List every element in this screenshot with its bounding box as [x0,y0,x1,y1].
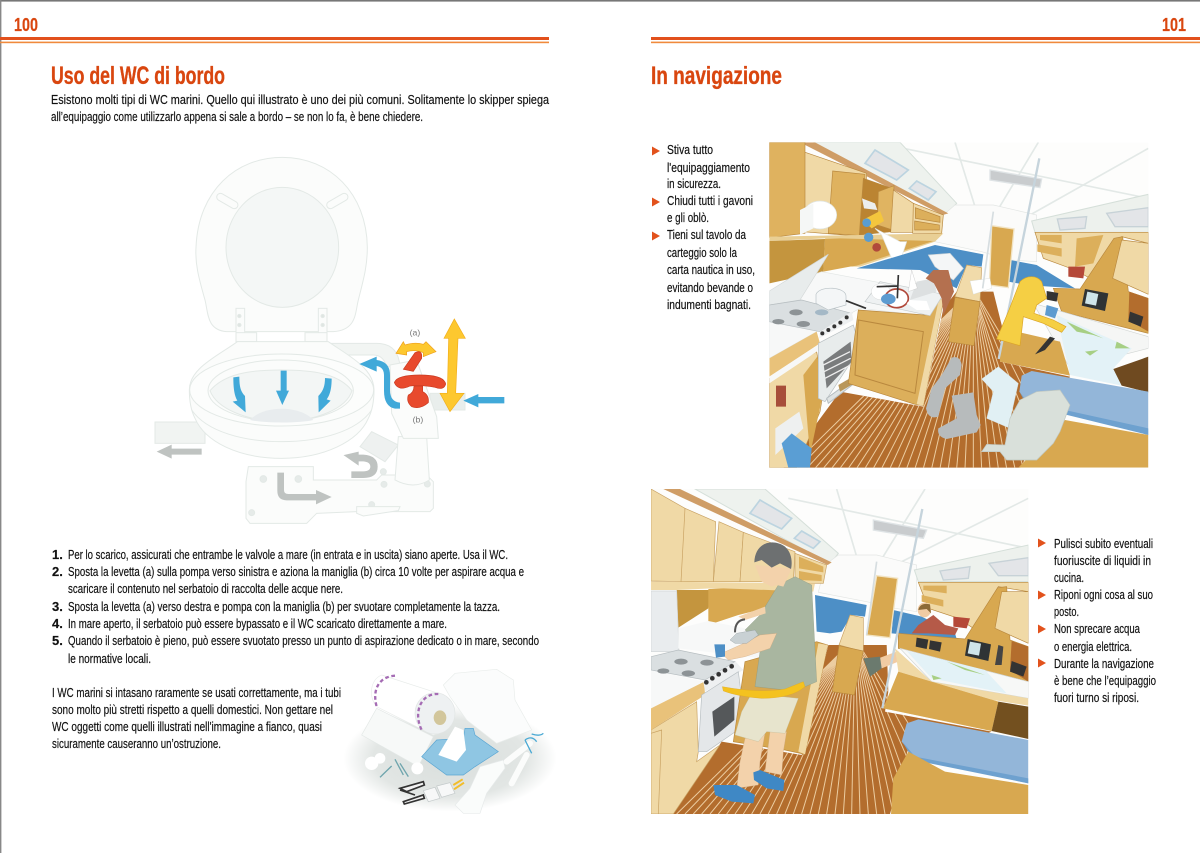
illustration: tidy cabin with crew [651,489,1028,814]
sink with dishes [865,270,943,316]
label (b): (b) [413,414,423,424]
floor [783,292,1070,468]
seat lid [196,157,367,332]
mug [714,644,725,658]
counter left [651,670,704,708]
table base [883,648,1028,731]
sock/boots [926,357,981,439]
cabinet lower band and rear wall [769,233,943,267]
connecting hose with clamp [360,432,398,462]
bullet: rest: fuori turno si riposi. [1054,690,1139,705]
step 5: le normative locali. [68,651,151,666]
bullet: stowage: in sicurezza. [667,176,721,191]
inlet hose [327,343,400,367]
bullet: chart table: Tieni sul tavolo da [667,227,747,242]
lower left cabinet [769,352,823,468]
wood trim [800,142,948,215]
label (a): (a) [410,328,420,338]
warning paragraph: I WC marini si intasano raramente se usati correttamente, ma i tubi [52,685,341,700]
gray arrow bottom [277,473,332,504]
left ceiling panel [813,142,957,215]
yellow pills [453,779,464,789]
bullet: stowage [652,142,750,191]
crew member in berth [863,603,958,677]
illustration: items not to flush [343,669,557,813]
bullet: lockers: Chiudi tutti i gavoni [667,193,753,208]
step 2 [52,564,524,596]
yellow lever arrow (a) [396,342,436,357]
step 2: scaricare il contenuto nel serbatoio di raccolta delle acque nere. [68,581,343,596]
red pump handle and lever [394,352,446,408]
bullet: chart table: evitando bevande o [667,280,753,295]
bullet: rest [1038,656,1156,705]
central locker [955,265,982,302]
central locker [839,615,863,652]
blue seat [1019,371,1148,435]
warning paragraph: sicuramente causeranno un’ostruzione. [52,736,221,751]
upper cabinets [651,489,827,583]
yellow double arrow (pump stroke) [440,319,465,412]
bullet: chart table: carta nautica in uso, [667,262,755,277]
cotton pads and buds [365,753,423,777]
pot [816,288,846,310]
dishes and falling items from cupboard [800,198,907,258]
counter [678,621,762,658]
intro text: Esistono molti tipi di WC marini. Quello qui illustrato è uno dei più comuni. Solitamente lo skipper spiega [51,92,550,107]
ceiling hatch center [873,520,927,538]
door [989,226,1014,288]
legs [737,732,787,788]
right upper cabinets [918,582,1028,628]
floor stripes [798,300,1025,468]
map on floor [982,367,1018,428]
lower cabinet [651,702,720,814]
step 5 [52,633,539,666]
bullet: save water: o energia elettrica. [1054,639,1132,654]
step 5: Quando il serbatoio è pieno, può essere svuotato presso un punto di aspirazione dedicato o in mare, secondo [68,633,539,648]
bullet: spills: cucina. [1054,570,1084,585]
door [867,576,898,638]
chart table and chart [1033,303,1148,368]
counter left [769,271,907,358]
blue berth [857,245,983,288]
shorts [735,693,798,742]
bullet: rest: è bene che l’equipaggio [1054,673,1156,688]
pump base plate [246,467,433,523]
page number 100: 100 [14,15,38,35]
illustration: marine toilet with arrows [155,157,504,523]
pump body [390,360,438,438]
head [755,565,792,587]
intake pipe right [430,393,465,410]
numbered instructions [52,547,539,666]
right bulkhead [898,587,1028,682]
step 1: 1. [52,547,63,562]
gray arrow left [157,445,202,459]
warning paragraph [52,685,341,751]
header rule left [0,37,549,43]
towel on island [928,253,963,280]
chart table top [900,648,1028,698]
bullet: spills: fuoriuscite di liquidi in [1054,553,1151,568]
bullet: lockers [652,193,753,225]
blue arrows in bowl [233,357,504,412]
step 4: 4. [52,616,63,631]
header rule right [651,37,1200,43]
hinges [236,308,327,342]
bowl body [189,342,374,458]
outlet pipe [155,422,205,443]
table base [1000,332,1070,376]
bullet: save water: Non sprecare acqua [1054,621,1141,636]
stove [769,300,852,332]
bullet: chart table [652,227,755,312]
arm [722,633,777,660]
right upper shelf [1035,232,1148,280]
blister packs [423,783,455,802]
bullet: chart table: carteggio solo la [667,245,738,260]
heading: Uso del WC di bordo: Uso del WC di bordo [51,62,225,90]
safety strap [722,682,805,698]
bullet: rest: Durante la navigazione [1054,656,1154,671]
paper tail [362,708,433,767]
shirt [745,577,817,691]
page number 101: 101 [1162,15,1186,35]
bullet: lockers: e gli oblò. [667,210,709,225]
bullet: stowage: l'equipaggiamento [667,160,750,175]
yellow jacket [997,277,1066,346]
right bulkhead [1053,237,1148,333]
pole [999,158,1039,359]
blue arrow from pump up to bowl [359,357,400,409]
bullet: chart table: indumenti bagnati. [667,297,751,312]
illustration: messy cabin [769,142,1148,468]
bullet list 1 [652,142,755,312]
bullet: save water [1038,621,1141,654]
wipes pack [422,728,498,775]
bullet list 2 [1038,536,1156,705]
upper left cabinets [769,142,943,238]
step 2: Sposta la levetta (a) sulla pompa verso sinistra e aziona la maniglia (b) circa 10 volte per aspirare acqua e [68,564,524,579]
blue arrow intake [463,394,504,407]
man cooking [713,542,817,803]
galley island [733,642,828,754]
step 3: 3. [52,599,63,614]
step 3: Sposta la levetta (a) verso destra e pompa con la maniglia (b) per svuotare completamente la tazza. [68,599,500,614]
rear galley wall [677,590,710,628]
gray arrow U-turn [344,452,377,478]
kettle [730,630,758,643]
ceiling lines [903,142,1148,215]
bullet: stowing: Riponi ogni cosa al suo [1054,587,1153,602]
floor [673,645,992,814]
stove lid [769,254,828,305]
bullet: spills [1038,536,1153,585]
grey sweater [982,390,1070,460]
tampon and string [507,733,543,783]
settee [902,719,1028,783]
radio [1035,337,1055,354]
wood trim [663,489,832,565]
hatches left [750,500,820,548]
ceiling lines [788,489,1028,565]
bullet: stowing [1038,587,1153,619]
floor stripes [677,638,965,814]
intro text [51,92,550,124]
panel: right page [651,15,1200,814]
step 5: 5. [52,633,63,648]
bullet: spills: Pulisci subito eventuali [1054,536,1153,551]
right ceiling band [1032,194,1148,232]
step 1: Per lo scarico, assicurati che entrambe le valvole a mare (in entrata e in uscita) siano aperte. Usa il WC. [68,547,508,562]
ceiling hatch center [990,170,1042,188]
nappy [443,669,532,743]
bullet: stowage: Stiva tutto [667,142,713,157]
heading: In navigazione: In navigazione [651,62,782,90]
razor blades [400,782,424,804]
warning paragraph: WC oggetti come quelli illustrati nell'immagine a fianco, quasi [52,719,322,734]
oven [818,324,856,404]
shoes [713,785,755,803]
sanitary pad [455,760,505,813]
warning paragraph: sono molto più stretti rispetto a quelli domestici. Non gettare nel [52,702,333,717]
cabinet under band [651,582,815,592]
stove [651,650,735,680]
step 4: In mare aperto, il serbatoio può essere bypassato e il WC scaricato direttamente a mare. [68,616,447,631]
intro text: all’equipaggio come utilizzarlo appena si sale a bordo – se non lo fa, è bene chiedere. [51,109,423,124]
instruments [1047,289,1143,327]
settee base [1018,420,1148,468]
blue berth [815,595,867,633]
right ceiling band [914,545,1028,582]
left ceiling panel [695,489,838,564]
hatch left [865,150,936,200]
galley island [848,297,944,406]
bullet: stowing: posto. [1054,604,1079,619]
step 2: 2. [52,564,63,579]
back wall [818,555,917,612]
pump column [395,437,429,485]
oven [698,672,745,752]
paper roll [371,675,455,735]
instruments [916,638,1027,677]
panel: left page [0,15,557,813]
pole [882,509,922,708]
back wall [935,205,1037,262]
